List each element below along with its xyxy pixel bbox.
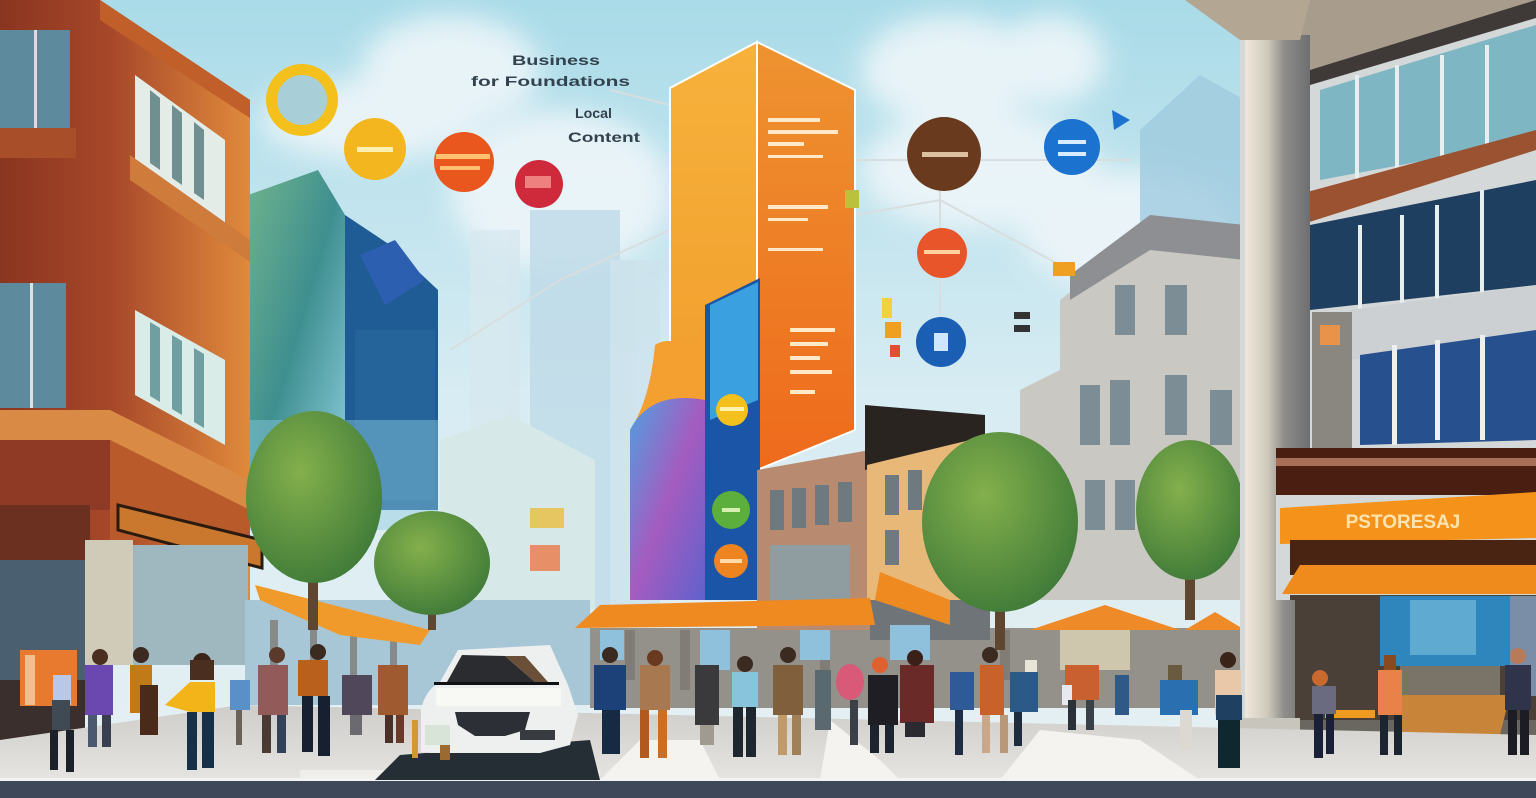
people left group xyxy=(50,644,408,772)
car shadow xyxy=(375,740,600,780)
icon: red circle xyxy=(515,160,563,208)
icon: blue circle xyxy=(1044,119,1100,175)
crowd xyxy=(50,644,1531,772)
blue and violet signage block xyxy=(630,278,760,600)
people middle group xyxy=(594,647,1242,768)
icon: small pins xyxy=(845,190,1075,357)
red brick building left xyxy=(0,0,262,740)
pale mid building xyxy=(440,415,595,610)
orange central tower xyxy=(670,42,855,470)
storefront buildings centre xyxy=(575,405,985,630)
road strip xyxy=(0,780,1536,798)
clouds xyxy=(260,15,1240,290)
orange notice board xyxy=(20,650,77,706)
pavement xyxy=(0,705,1536,780)
heading text: Content xyxy=(568,129,640,145)
icon: orange circle xyxy=(434,132,494,192)
icon: yellow circle xyxy=(344,118,406,180)
icon: navy rounded circle xyxy=(916,317,966,367)
green trees left xyxy=(246,411,490,630)
shopfronts behind the crowd xyxy=(245,600,1240,708)
green glass tower xyxy=(248,170,438,530)
grey classical building right xyxy=(1020,215,1245,600)
right stone building: PSTORESAJ xyxy=(1346,512,1460,533)
connector lines xyxy=(450,90,1130,350)
icon: small blue arrow xyxy=(1112,110,1130,130)
heading text: Business xyxy=(512,52,600,68)
heading text xyxy=(471,52,640,145)
heading text: for Foundations xyxy=(471,73,630,89)
icon: yellow magnifier circle xyxy=(266,64,338,136)
white car xyxy=(412,645,578,760)
striped awnings left xyxy=(255,585,430,645)
distant skyline xyxy=(470,75,1245,610)
heading text: Local xyxy=(575,105,612,121)
white pavement highlights xyxy=(300,720,1200,780)
stone column xyxy=(1185,0,1310,750)
right large green tree xyxy=(922,432,1244,650)
market umbrellas xyxy=(1030,605,1180,630)
people right group xyxy=(1312,648,1531,758)
icon: orange-red circle xyxy=(917,228,967,278)
right stone building xyxy=(1240,0,1536,798)
tower text lines xyxy=(768,118,838,394)
icon: brown circle xyxy=(907,117,981,191)
